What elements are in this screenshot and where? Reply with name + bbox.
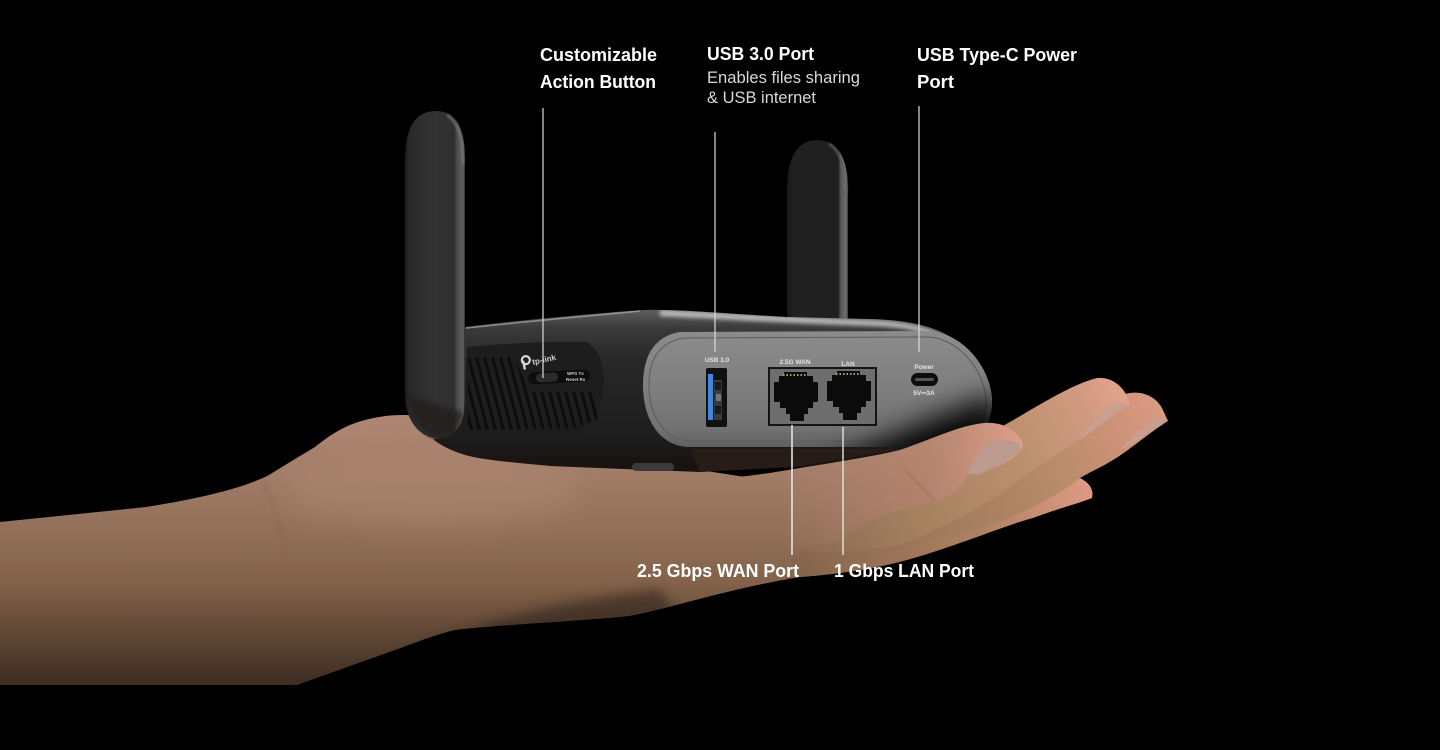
body top highlight <box>660 313 991 405</box>
ethernet ports box <box>769 368 876 425</box>
port label: 5V 3A: 5V⎓3A <box>913 390 935 397</box>
label: USB 3.0 port: Enables files sharing <box>707 68 860 87</box>
wrist crease <box>262 482 285 560</box>
ventilation slits <box>468 357 598 430</box>
hand: thumb <box>590 423 1023 552</box>
right antenna top highlight <box>829 144 846 195</box>
action button: WPS Tx <box>567 371 584 376</box>
left antenna base reflection <box>407 395 463 439</box>
bottom foot <box>632 463 674 471</box>
under panel reflection <box>690 449 900 472</box>
label: USB 3.0 port: USB 3.0 Port <box>707 44 814 64</box>
LAN port <box>827 371 871 420</box>
panel inner line <box>649 337 986 441</box>
thumb nail <box>968 440 1020 475</box>
left antenna <box>405 111 465 439</box>
label: USB Type-C power port <box>917 45 1077 92</box>
label: customizable action button: Customizable <box>540 45 657 65</box>
leader line: power <box>918 106 920 352</box>
label: 2.5 Gbps WAN port: 2.5 Gbps WAN Port <box>637 561 799 581</box>
left antenna top highlight <box>447 115 463 165</box>
panel thumb shadow <box>830 381 992 447</box>
router <box>433 310 1005 480</box>
label: customizable action button <box>540 45 657 92</box>
leader line: USB 3.0 <box>714 132 716 352</box>
thumb tip colour <box>780 423 1023 548</box>
WAN port <box>774 372 818 421</box>
leader line: action button <box>542 108 544 378</box>
index finger nail <box>1080 402 1130 440</box>
middle finger nail <box>1120 417 1168 450</box>
hand: middle finger <box>790 393 1168 560</box>
label: 1 Gbps LAN port: 1 Gbps LAN Port <box>834 561 974 581</box>
palm lower shadow <box>452 585 676 630</box>
port label: 2.5G WAN: 2.5G WAN <box>779 359 811 366</box>
body left sheen <box>466 311 640 328</box>
label: USB 3.0 port: & USB internet <box>707 88 816 107</box>
USB port <box>706 368 727 427</box>
action button <box>528 369 590 385</box>
hand: forearm and palm <box>0 415 830 685</box>
label: USB Type-C power port: USB Type-C Power <box>917 45 1077 65</box>
action button: Reset Rx <box>566 377 586 382</box>
WAN contacts <box>783 374 806 376</box>
router body <box>433 310 992 472</box>
port label: USB 3.0: USB 3.0 <box>705 357 730 364</box>
LAN contacts <box>836 373 859 375</box>
hand: index finger <box>790 378 1130 552</box>
label: USB 3.0 port <box>707 44 860 107</box>
port label: Power: Power <box>914 364 934 371</box>
label: USB Type-C power port: Port <box>917 72 954 92</box>
brand logo <box>521 350 558 370</box>
infographic: router on a hand <box>0 47 1168 685</box>
vent panel <box>454 342 604 438</box>
port label: LAN: LAN <box>841 361 855 368</box>
USB-C port <box>911 373 938 386</box>
thumb knuckle crease <box>905 470 935 500</box>
label: customizable action button: Action Button <box>540 72 656 92</box>
palm highlight <box>317 486 542 520</box>
leader line: WAN <box>791 425 793 555</box>
rear port panel <box>643 331 992 447</box>
brand logo: tp-link <box>531 353 557 367</box>
hand: pinky finger <box>790 474 1092 577</box>
right antenna <box>787 140 848 330</box>
leader line: LAN <box>842 427 844 555</box>
